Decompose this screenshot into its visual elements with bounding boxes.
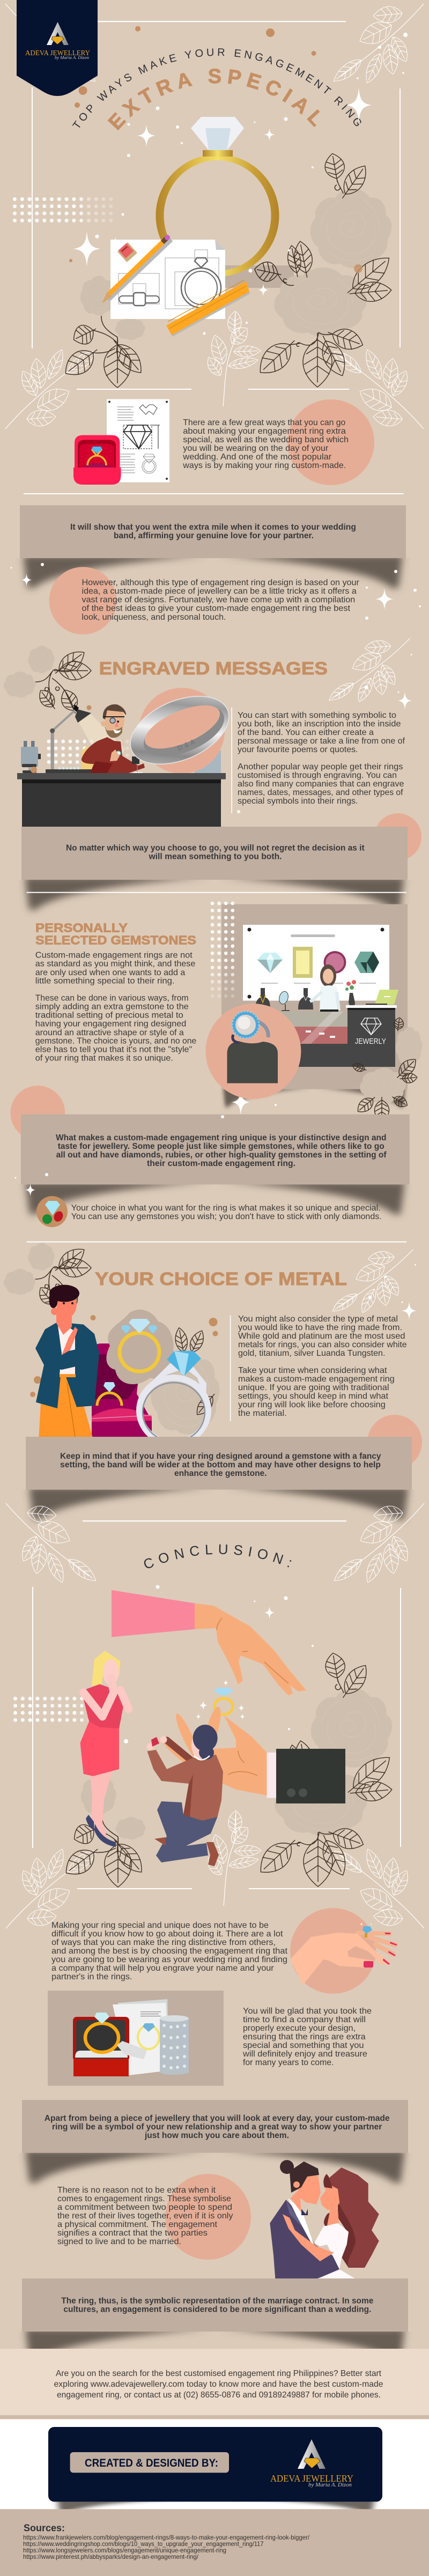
heading: engraved messages: ENGRAVED MESSAGES <box>99 658 328 678</box>
callout banner 1: It will show that you went the extra mile when it comes to your wedding <box>70 523 356 532</box>
callout banner 3: taste for jewellery. Some people just like simple gemstones, while others like to go <box>58 1142 384 1151</box>
metal section paragraph: You might also consider the type of metal <box>238 1315 398 1324</box>
heading: personally selected gemstones: SELECTED GEMSTONES <box>35 933 196 947</box>
callout banner 1: band, affirming your genuine love for your partner. <box>114 531 314 540</box>
conclusion paragraph two: will definitely enjoy and treasure <box>242 2050 367 2059</box>
sparkles <box>73 87 372 266</box>
couple illustration <box>270 2160 379 2278</box>
engagement ring with sparkles <box>196 1680 245 1720</box>
woman in red dress <box>80 1651 129 1847</box>
shop counter: JEWERLY <box>355 1037 386 1046</box>
sources band <box>0 2509 429 2576</box>
paragraph two: However, although this type of engagement ring design is based on your <box>82 578 360 588</box>
call to action band: engagement ring, or contact us at (02) 8655-0876 and 09189249887 for mobile phones. <box>57 2391 381 2400</box>
sources band: https://www.weddingringshop.com/blogs/10_ways_to_upgrade_your_engagement_ring/117 <box>23 2540 264 2548</box>
banner shadow <box>25 2150 405 2183</box>
metal section paragraph: unique. If you are going with traditional <box>238 1383 389 1392</box>
title: arc subtitle: TOP WAYS MAKE YOUR ENGAGEMENT RING <box>72 48 361 128</box>
platinum ring <box>139 1351 208 1443</box>
intro paragraph <box>182 418 349 470</box>
conclusion paragraph one: difficult if you know how to go about doing it. There are a lot <box>51 1929 283 1939</box>
gem choice note <box>71 1204 382 1221</box>
engraved section paragraph: Another popular way people get their rings <box>238 762 403 771</box>
dot column <box>210 902 235 998</box>
conclusion paragraph three: There is no reason not to be extra when it <box>57 2186 216 2195</box>
icon: red ring box <box>73 435 121 485</box>
banner shadow <box>25 2328 405 2362</box>
white leaf branch: metal section <box>329 1249 413 1315</box>
gemstones paragraph: These can be done in various ways, from <box>35 994 189 1003</box>
gemstones paragraph: having your engagement ring designed <box>35 1020 186 1029</box>
shop counter <box>346 1005 397 1067</box>
ring box <box>91 1343 152 1437</box>
decorative frame: intro divider <box>24 493 403 494</box>
conclusion paragraph two: ensuring that the rings are extra <box>243 2032 366 2042</box>
gem board <box>243 925 389 1000</box>
callout banner 3: their custom-made engagement ring. <box>147 1159 295 1168</box>
created by pill: CREATED & DESIGNED BY: <box>85 2457 218 2469</box>
banner shadow <box>25 1181 405 1214</box>
heading: personally selected gemstones: PERSONALLY <box>35 920 128 934</box>
lamp <box>46 704 116 773</box>
conclusion paragraph two: You will be glad that you took the <box>243 2007 372 2016</box>
workshop counter <box>17 773 226 827</box>
callout banner 2: will mean something to you both. <box>149 852 282 862</box>
gemstones paragraph: else has to tell you that it's not the "style" <box>35 1045 192 1054</box>
design document illustration <box>107 399 169 482</box>
engraved section paragraph: names, dates, messages, and other types of <box>238 788 403 797</box>
conclusion paragraph one: Making your ring special and unique does not have to be <box>51 1921 269 1930</box>
icon: ruler <box>166 280 250 337</box>
callout banner 1 <box>20 505 406 558</box>
display case <box>282 1012 347 1067</box>
conclusion paragraph two: time to find a company that will <box>243 2015 366 2024</box>
metal section paragraph: gold, titanium, silver Luanda Tungsten. <box>238 1349 385 1358</box>
intro paragraph: ways is by making your ring custom-made. <box>182 461 346 470</box>
engraved section paragraph: of the band. You can either create a <box>238 728 374 737</box>
gem choice note: Your choice in what you want for the ring is what makes it so unique and special. <box>71 1204 381 1213</box>
callout banner 2: No matter which way you choose to go, you will not regret the decision as it <box>66 844 365 853</box>
gold diamond ring <box>156 117 279 277</box>
icon: gemstones <box>36 1196 68 1227</box>
man kneeling with ring box <box>147 1725 223 1866</box>
sparkles and dots: paragraph two <box>11 563 421 710</box>
conclusion paragraph one: and among the best is by choosing the engagement ring that <box>51 1947 288 1956</box>
metal section paragraph: the material. <box>238 1409 287 1418</box>
conclusion paragraph one: partner's in the rings. <box>51 1972 132 1981</box>
panel shadow: shop <box>223 1087 405 1107</box>
callout banner 5: just how much you care about them. <box>144 2131 289 2140</box>
banner shadow <box>25 877 404 910</box>
callout banner 4: enhance the gemstone. <box>174 1469 267 1478</box>
title: extra special: EXTRA SPECIAL <box>107 69 320 131</box>
conclusion paragraph two: for many years to come. <box>243 2058 334 2067</box>
metal section paragraph: Take your time when considering what <box>238 1366 387 1375</box>
rose and leaves behind rings <box>151 1350 220 1435</box>
jeweller workshop illustration <box>21 704 221 779</box>
light cone <box>79 714 125 779</box>
metal section paragraph: settings, you should keep in mind what <box>238 1392 389 1401</box>
conclusion paragraph three: a physical commitment. The engagement <box>57 2220 218 2229</box>
gem choice note: You can use any gemstones you wish; you don't have to stick with only diamonds. <box>71 1212 382 1221</box>
paragraph two: look, uniqueness, and personal touch. <box>82 613 226 622</box>
conclusion paragraph three <box>57 2186 233 2246</box>
callout banner 5: ring will be a symbol of your new relationship and a great way to show your partner <box>52 2122 382 2132</box>
peach blob: banner three <box>10 1086 65 1140</box>
intro paragraph: special, as well as the wedding band which <box>183 435 349 444</box>
paragraph two <box>82 578 360 622</box>
peach blob: paragraph two <box>49 567 117 635</box>
sparkle and dot: below shop panel <box>232 1089 277 1116</box>
gemstones paragraph: little something special to their ring. <box>35 976 175 985</box>
callout banner 6: cultures, an engagement is considered to be more significant than a wedding. <box>63 2305 371 2314</box>
callout banner 3: What makes a custom-made engagement ring unique is your distinctive design and <box>56 1133 386 1142</box>
peach blob: engraved section <box>139 688 225 774</box>
callout banner 6 <box>22 2278 408 2332</box>
logo <box>270 2439 353 2488</box>
metal section paragraph: makes a custom-made engagement ring <box>238 1375 395 1384</box>
white leaf branch: engraved section <box>326 639 410 704</box>
panel: jewellery shop <box>209 900 408 1089</box>
callout banner 4 <box>26 1437 412 1490</box>
small ring in box <box>97 1382 122 1406</box>
sparkle and dots: metal section <box>368 1264 417 1320</box>
gemstones paragraph: are only used when one wants to add a <box>35 968 185 977</box>
engraved section paragraph: your favourite poems or quotes. <box>238 745 358 754</box>
logo: ADEVA JEWELLERY <box>270 2473 353 2484</box>
conclusion paragraph one: a company that will help you engrave your name and your <box>51 1964 274 1973</box>
peach circle: ring stand <box>205 1004 301 1099</box>
gemstones paragraph: gemstone. The choice is yours, and no one <box>35 1036 196 1045</box>
decorative frame: conclusion <box>6 1503 424 1928</box>
conclusion paragraph three: comes to engagement rings. These symbolise <box>57 2194 231 2203</box>
microscope <box>21 741 41 773</box>
peach blob: banner two <box>374 813 421 860</box>
engraved section paragraph: you both, like an inscription into the inside <box>238 719 401 729</box>
metal section illustration <box>30 1285 220 1443</box>
logo: by Maria A. Dizon <box>308 2482 352 2488</box>
gemstones paragraph: of your ring that makes it so unique. <box>35 1054 173 1063</box>
giant hand holding ring from above <box>112 1590 306 1695</box>
gemstones paragraph: traditional setting of precious metal to <box>35 1011 183 1020</box>
pearl ring on a stand <box>227 1012 278 1083</box>
laptop <box>366 990 398 1005</box>
roses: engraved section <box>4 645 55 697</box>
callout banner 5 <box>22 2100 408 2153</box>
machine behind the ring <box>195 751 221 773</box>
callout banner 6: The ring, thus, is the symbolic representation of the marriage contract. In some <box>61 2297 373 2305</box>
divider <box>27 892 406 893</box>
jeweller <box>82 704 145 773</box>
taupe strip behind the sketch <box>225 265 294 288</box>
heading: personally selected gemstones <box>35 920 196 947</box>
leaf with sparkle over the ring strip <box>249 259 283 296</box>
banner shadow <box>29 1487 409 1520</box>
gold ring <box>120 1319 159 1371</box>
callout banner 3: all out and have diamonds, rubies, or other high-quality gemstones in the setting of <box>56 1150 387 1160</box>
giant hand from below with dark sleeve <box>158 1705 345 1803</box>
icon: eraser <box>117 242 137 262</box>
decorative leaves and roses: shop <box>351 1017 422 1122</box>
conclusion paragraph three: the rest of their lives together, even if it is only <box>57 2211 233 2221</box>
conclusion paragraph two: properly execute your design, <box>243 2024 356 2033</box>
banner shadow <box>23 555 403 588</box>
gemstones paragraph <box>35 951 196 1063</box>
sources band: https://www.pinterest.ph/abbysparks/design-an-engagement-ring/ <box>23 2553 199 2560</box>
white credits band <box>0 2419 429 2509</box>
sources band: https://www.longsjewelers.com/blogs/engagement/unique-engagement-ring <box>23 2547 226 2554</box>
decorative frame: header <box>5 4 424 429</box>
sources band: https://www.frankjewelers.com/blog/engagement-rings/8-ways-to-make-your-engagement-ring-look-bigger/ <box>23 2534 310 2541</box>
conclusion paragraph one <box>51 1921 288 1981</box>
engraved section paragraph <box>231 708 405 813</box>
heading: your choice of metal: YOUR CHOICE OF METAL <box>95 1269 347 1289</box>
dark leaf branch: metal section <box>35 1243 91 1314</box>
red box with gold ring <box>73 2013 147 2076</box>
metal section paragraph: your ring will look like before choosing <box>238 1400 386 1409</box>
divider <box>27 1242 406 1243</box>
paragraph two: idea, a custom-made piece of jewellery can be a little tricky as it offers a <box>82 587 357 596</box>
conclusion paragraph one: of ways that you can make the ring distinctive from others, <box>51 1938 276 1947</box>
callout banner 3 <box>21 1115 410 1184</box>
engraved section paragraph: You can start with something symbolic to <box>238 711 396 720</box>
necklace busts and mirror <box>255 988 313 1011</box>
intro paragraph: you will be wearing on the day of your <box>183 444 329 453</box>
gems on tray <box>58 767 79 770</box>
metal section paragraph <box>230 1315 407 1421</box>
engraved section paragraph: customised is through engraving. You can <box>238 771 397 780</box>
flower vase <box>345 980 356 1011</box>
engraved section paragraph: also find many companies that can engrave <box>238 780 404 789</box>
shop assistant <box>310 964 339 1015</box>
yellow chair <box>82 747 121 773</box>
gemstones paragraph: simply adding an extra gemstone to the <box>35 1003 189 1012</box>
brown dots <box>30 1315 218 1397</box>
roses: metal section <box>4 1243 55 1295</box>
sources band: Sources: <box>24 2523 65 2534</box>
conclusion paragraph one peach blob <box>290 1908 376 1994</box>
icon: pencil <box>102 235 171 303</box>
callout banner 4: Keep in mind that if you have your ring designed around a gemstone with a fancy <box>60 1452 381 1461</box>
credits card <box>48 2427 382 2501</box>
panel: ring box and design sheets <box>48 1991 224 2086</box>
sparkles and dots: conclusion <box>124 1585 314 1743</box>
logo banner <box>17 0 98 96</box>
metal section paragraph: While gold and platinum are the most used <box>238 1332 405 1341</box>
logo banner: ADEVA JEWELLERY <box>25 49 90 57</box>
metal section paragraph: you would like to have the ring made from. <box>238 1323 402 1332</box>
conclusion paragraph two <box>242 2007 372 2067</box>
paragraph two: of the best ideas to give your custom-made engagement ring the best <box>82 604 351 613</box>
sparkle: below banner three <box>15 1177 36 1197</box>
paper sheets <box>113 1999 169 2075</box>
created by pill <box>70 2452 229 2473</box>
call to action band: Are you on the search for the best customised engagement ring Philippines? Better start <box>56 2369 382 2378</box>
dark leaf branch: engraved section <box>35 646 91 717</box>
peach blob: banner four <box>367 1415 422 1469</box>
intro paragraph: There are a few great ways that you can go <box>183 418 345 427</box>
engraved silver ring: D & A <box>176 737 197 752</box>
engraved section paragraph: special symbols into their rings. <box>238 797 358 806</box>
brown and white confetti dots <box>69 26 408 335</box>
callout banner 2 <box>21 827 408 880</box>
call to action band <box>0 2349 429 2419</box>
intro paragraph: wedding. And one of the most popular <box>182 452 332 462</box>
conclusion paragraph three: signed to live and to be married. <box>57 2237 181 2246</box>
metal section paragraph: metals for rings, you can also consider white <box>238 1340 407 1349</box>
ring design sketch paper <box>110 240 225 319</box>
conclusion paragraph three: signifies a contract that the two parties <box>57 2229 208 2238</box>
engraved section paragraph: personal message or take a line from one of <box>238 737 405 746</box>
engraved silver ring <box>120 682 239 778</box>
paragraph two: vast range of designs. Fortunately, we have come up with a compilation <box>82 596 355 605</box>
conclusion paragraph one: you are going to be wearing as your wedding ring and finding <box>51 1955 287 1964</box>
peach blob: intro <box>287 399 374 485</box>
heading: conclusion: CONCLUSION: <box>144 1544 292 1569</box>
conclusion paragraph two: special and something that you <box>243 2041 364 2050</box>
callout banner 5: Apart from being a piece of jewellery that you will look at every day, your custom-made <box>45 2114 390 2123</box>
peach blob: conclusion paragraph three <box>165 2174 251 2260</box>
rolled plan <box>160 2015 189 2075</box>
gemstones paragraph: as standard as you might think, and these <box>35 960 195 969</box>
conclusion paragraph three: a commitment between two people to spend <box>57 2203 232 2212</box>
intro paragraph: about making your engagement ring extra <box>183 427 346 436</box>
logo banner: by Maria A. Dizon <box>55 55 89 60</box>
hand with ring illustration <box>291 1922 397 1985</box>
callout banner 4: setting, the band will be wider at the bottom and may have other designs to help <box>60 1460 381 1469</box>
call to action band: exploring www.adevajewellery.com today to know more and have the best custom-made <box>54 2380 383 2389</box>
credits card shadow <box>56 2497 375 2513</box>
man thinking <box>35 1285 99 1437</box>
gemstones paragraph: Custom-made engagement rings are not <box>35 951 193 960</box>
taupe blob <box>106 1310 174 1384</box>
gemstones paragraph: around an attractive shape or style of a <box>35 1028 184 1037</box>
